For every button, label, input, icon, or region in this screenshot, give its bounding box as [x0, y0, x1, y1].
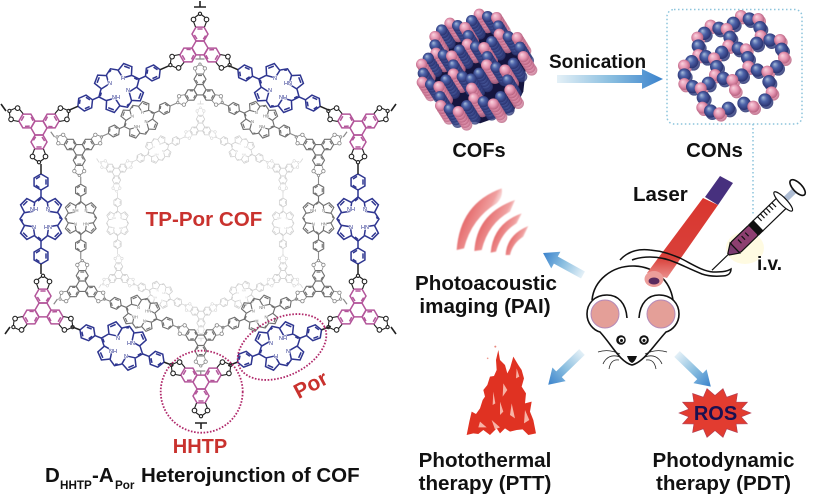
- caption: heterojunction of COF: HHTP: [60, 479, 92, 492]
- molecular network: middle grey ring: [51, 54, 347, 376]
- icon: ROS starburst: ROS: [694, 403, 737, 425]
- icon: mouse: [587, 266, 679, 369]
- dotted circle: HHTP: [161, 351, 243, 433]
- label: Por: Por: [290, 367, 332, 404]
- label: Photodynamic therapy (PDT): therapy (PDT): [656, 472, 791, 495]
- label: Photothermal therapy (PTT): [419, 449, 551, 495]
- caption: heterojunction of COF: Heterojunction of COF: [141, 464, 360, 487]
- caption: heterojunction of COF: -A: [92, 464, 114, 487]
- icon: photoacoustic waves: [457, 188, 528, 255]
- arrow: sonication: [557, 69, 663, 89]
- label: COFs: COFs: [452, 140, 506, 162]
- label: Photothermal therapy (PTT): Photothermal: [419, 449, 551, 472]
- caption: heterojunction of COF: Por: [115, 479, 135, 492]
- arrow: to PDT: [670, 347, 717, 393]
- label: Laser: Laser: [633, 183, 688, 206]
- dotted ellipse: Por: [227, 301, 337, 393]
- caption: heterojunction of COF: D: [45, 464, 60, 487]
- label: i.v.: i.v.: [757, 254, 782, 275]
- label: Photothermal therapy (PTT): therapy (PTT): [419, 472, 551, 495]
- dotted box around CONs: [667, 10, 802, 124]
- label: Photoacoustic imaging (PAI): [415, 272, 557, 318]
- label: Photodynamic therapy (PDT): [653, 449, 794, 495]
- icon: flame: [467, 346, 536, 435]
- CONs sphere sheet: [678, 10, 792, 122]
- label: Sonication: Sonication: [549, 52, 646, 73]
- dotted connector to syringe: [752, 124, 754, 215]
- laser beam and spot: [644, 176, 733, 287]
- label: Photoacoustic imaging (PAI): imaging (PAI): [419, 295, 551, 318]
- label: HHTP: HHTP: [173, 436, 227, 458]
- molecular network: innermost faded ring: [97, 101, 303, 342]
- arrow: to PTT: [542, 345, 589, 392]
- label: CONs: CONs: [686, 140, 743, 162]
- label: Photoacoustic imaging (PAI): Photoacoustic: [415, 272, 557, 295]
- icon: mouse tail: [620, 250, 731, 276]
- icon: ROS starburst: [679, 389, 751, 437]
- caption: heterojunction of COF: [45, 464, 360, 492]
- molecular network: outer coloured COF ring: [1, 1, 396, 429]
- COFs 3D sphere cluster: [416, 9, 537, 131]
- arrow: to PAI: [538, 245, 588, 283]
- icon: syringe: [703, 175, 810, 280]
- label: TP-Por COF: TP-Por COF: [146, 208, 262, 231]
- label: Photodynamic therapy (PDT): Photodynamic: [653, 449, 794, 472]
